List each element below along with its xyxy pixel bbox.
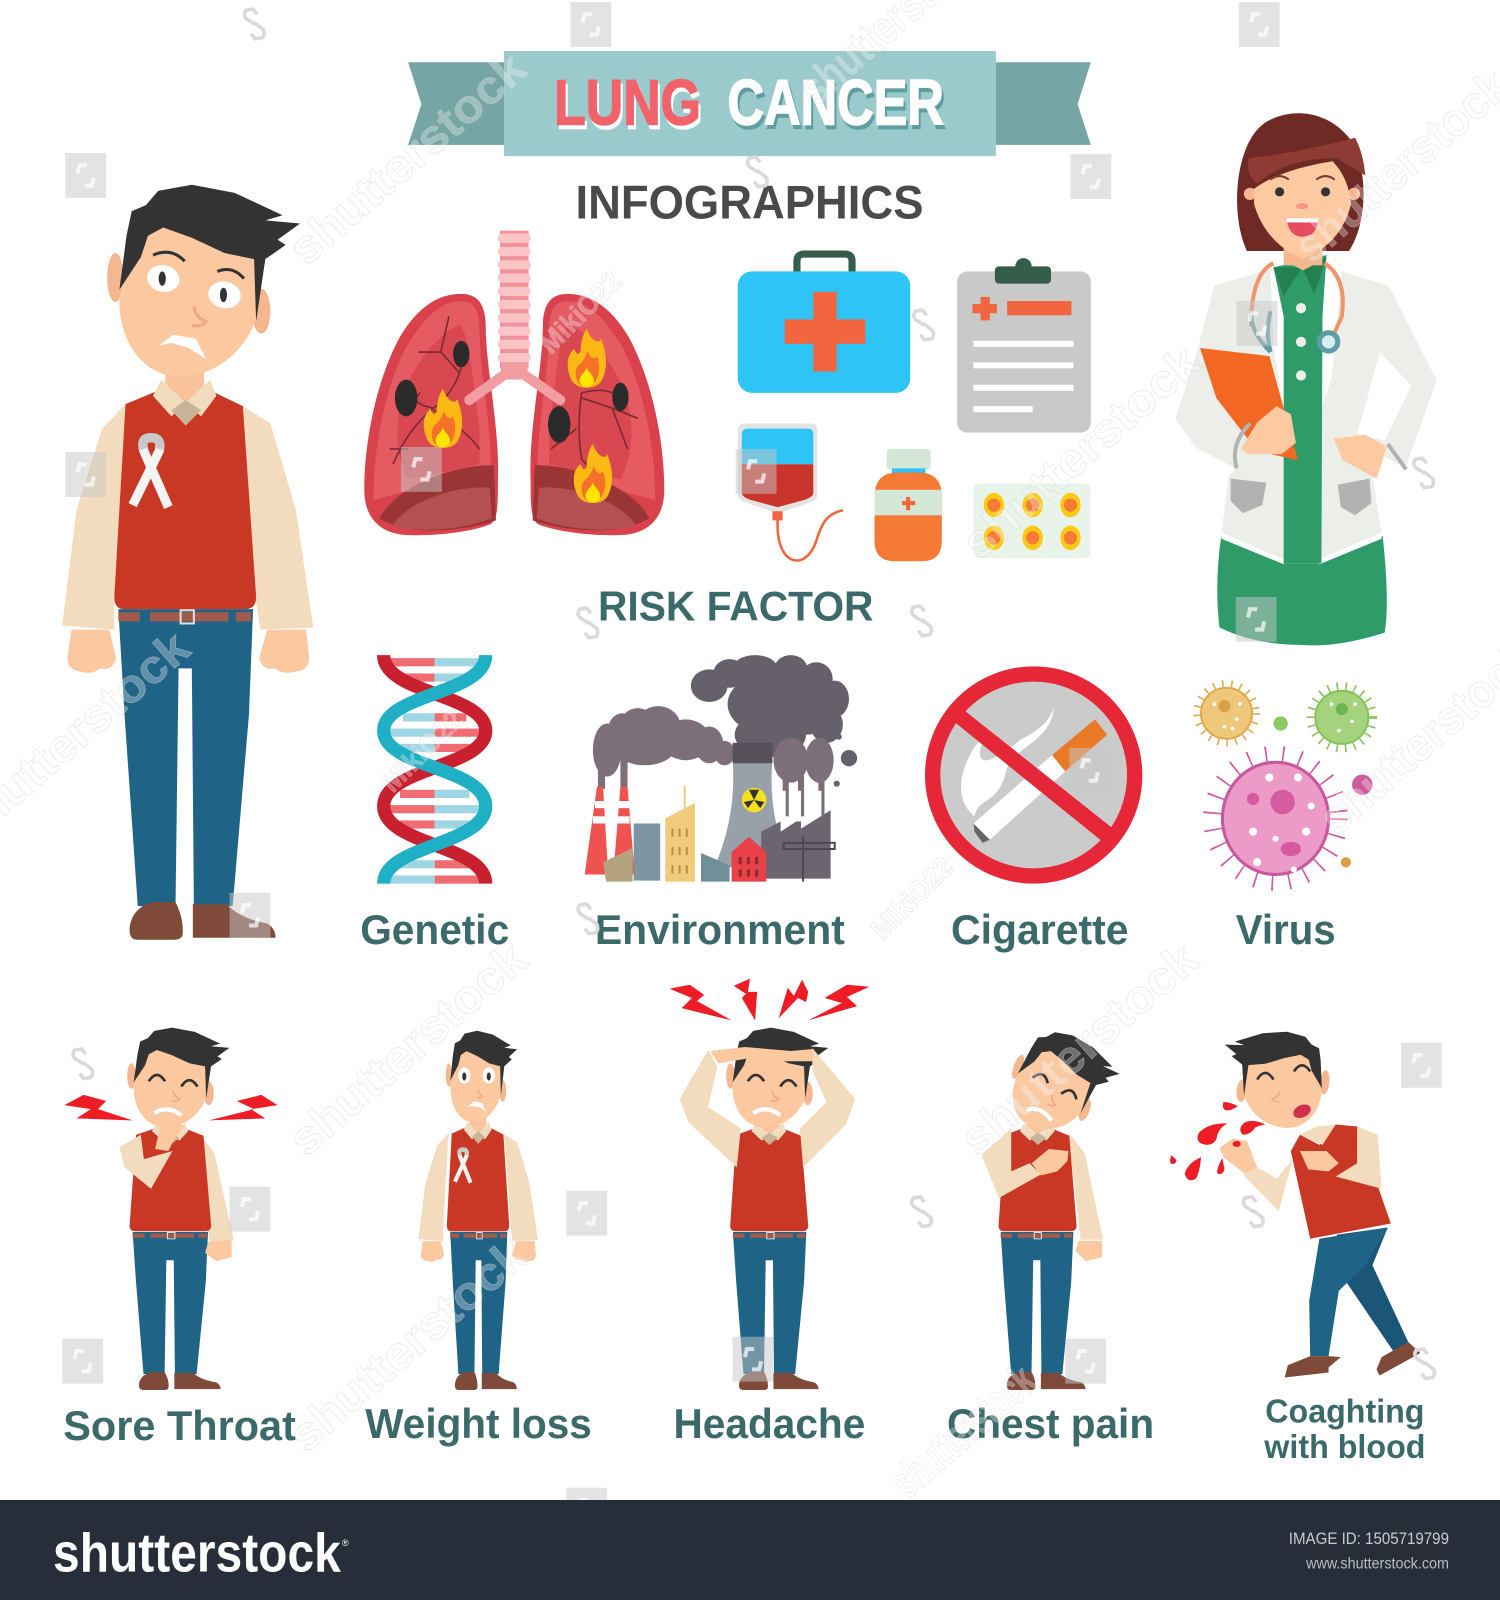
chimneys	[585, 787, 635, 874]
buildings	[603, 786, 766, 882]
watermark overlay: MikiO22	[375, 704, 470, 799]
watermark overlay: MikiO22	[865, 851, 960, 946]
symptom: sore throat figure	[64, 1028, 278, 1390]
stethoscope	[1251, 263, 1343, 352]
footer bar	[0, 1500, 1500, 1600]
watermark overlay: shutterstock	[279, 1228, 537, 1462]
heading: risk factor: RISK FACTOR	[598, 582, 873, 629]
left lung	[364, 294, 498, 535]
watermark overlay: shutterstock	[279, 41, 537, 275]
back leg	[1337, 1228, 1408, 1352]
label: Environment: Environment	[595, 906, 845, 953]
label: Weight loss: Weight loss	[365, 1400, 592, 1447]
label: Coaghting with blood: with blood	[1263, 1429, 1426, 1466]
icon: blood bag	[738, 423, 843, 560]
registered mark: ®	[342, 1538, 349, 1548]
pink virus	[1212, 755, 1339, 882]
factory	[761, 791, 835, 882]
watermark overlay: shutterstock	[881, 1354, 1046, 1508]
symptom: chest pain figure	[982, 1020, 1127, 1390]
symptom: weight loss figure	[418, 1031, 538, 1390]
symptom: coughing blood figure	[1170, 1025, 1420, 1378]
right lung	[530, 294, 664, 535]
watermark overlay: shutterstock	[950, 932, 1208, 1166]
smoke	[593, 655, 857, 816]
cigarette	[973, 755, 1065, 840]
title banner	[408, 51, 1091, 156]
watermark overlay: shutterstock	[952, 335, 1210, 569]
pain bolts	[64, 1095, 133, 1120]
trachea	[469, 231, 560, 400]
label: Coaghting with blood: Coaghting	[1265, 1393, 1424, 1430]
clipboard held	[1200, 348, 1298, 460]
image id: IMAGE ID: 1505719799	[1289, 1530, 1449, 1548]
footer logo: shutterstock	[53, 1521, 341, 1583]
green virus	[1311, 687, 1372, 748]
cooling tower	[714, 743, 791, 867]
icon: no smoking	[933, 674, 1135, 876]
icon: pill pack	[973, 484, 1091, 558]
icon: medicine bottle	[874, 449, 942, 561]
main patient figure	[62, 185, 313, 940]
icon: first aid kit	[738, 254, 910, 393]
pockets	[1231, 479, 1266, 513]
label: Coaghting with blood	[1263, 1393, 1426, 1466]
blood drops	[1170, 1102, 1265, 1180]
icon: clipboard	[957, 258, 1091, 433]
label: Sore Throat: Sore Throat	[63, 1402, 296, 1449]
front leg	[1309, 1228, 1388, 1356]
label: Headache: Headache	[673, 1400, 865, 1447]
icon: DNA helix	[384, 655, 486, 884]
watermark overlay: shutterstock	[279, 932, 537, 1166]
icon: virus	[1198, 685, 1372, 882]
watermark overlay: MikiO22	[533, 265, 628, 360]
icon: environment pollution	[585, 655, 857, 882]
website: www.shutterstock.com	[1305, 1555, 1449, 1572]
label: Chest pain: Chest pain	[947, 1400, 1154, 1447]
doctor figure	[1176, 113, 1437, 645]
prohibition bar	[950, 707, 1114, 843]
yellow virus	[1198, 685, 1255, 742]
label: Cigarette: Cigarette	[951, 906, 1129, 953]
vest	[1291, 1124, 1391, 1239]
smoke wisp	[961, 706, 1054, 816]
label: Virus: Virus	[1236, 906, 1336, 953]
title banner: LUNG	[554, 66, 701, 138]
label: Genetic: Genetic	[360, 906, 509, 953]
pain bolts	[669, 985, 732, 1020]
symptom: headache figure	[669, 979, 869, 1390]
buttons	[1296, 303, 1306, 381]
title banner: CANCER	[728, 66, 944, 138]
lungs illustration	[364, 231, 664, 535]
subtitle: INFOGRAPHICS	[576, 176, 923, 228]
